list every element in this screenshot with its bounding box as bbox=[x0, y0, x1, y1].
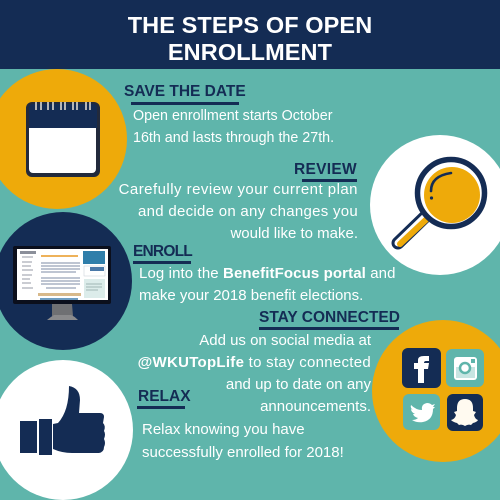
icon: calendar bbox=[0, 69, 127, 209]
text: save the date: 16th and lasts through the 27th. bbox=[133, 130, 334, 146]
text: stay connected: announcements. bbox=[260, 398, 371, 415]
text: review: Carefully review your current plan bbox=[119, 181, 358, 198]
text: review: would like to make. bbox=[230, 225, 358, 242]
icon: magnifying glass bbox=[370, 135, 500, 275]
heading: relax: RELAX bbox=[138, 388, 191, 405]
heading: enroll: ENROLL bbox=[133, 243, 192, 260]
text: save the date bbox=[133, 108, 334, 146]
title banner bbox=[0, 0, 500, 69]
title bbox=[128, 12, 372, 65]
text: stay connected bbox=[138, 332, 371, 415]
icon: computer monitor bbox=[0, 212, 132, 350]
text: relax: Relax knowing you have bbox=[142, 421, 305, 438]
text: stay connected: @WKUTopLife to stay connected bbox=[138, 354, 371, 371]
heading: stay connected: STAY CONNECTED bbox=[259, 309, 400, 326]
heading: review: REVIEW bbox=[294, 161, 357, 178]
title: THE STEPS OF OPEN bbox=[128, 12, 372, 38]
text: stay connected: Add us on social media at bbox=[199, 332, 371, 349]
text: relax: successfully enrolled for 2018! bbox=[142, 444, 344, 461]
text: enroll: make your 2018 benefit elections. bbox=[139, 287, 363, 304]
text: stay connected: and up to date on any bbox=[226, 376, 371, 393]
text: enroll bbox=[139, 265, 396, 304]
icon: thumbs up bbox=[0, 360, 133, 500]
text: enroll: Log into the BenefitFocus portal and bbox=[139, 265, 396, 282]
heading: save the date: SAVE THE DATE bbox=[124, 83, 246, 100]
text: relax bbox=[142, 421, 344, 461]
text: review bbox=[119, 181, 358, 242]
text: save the date: Open enrollment starts October bbox=[133, 108, 332, 124]
title: ENROLLMENT bbox=[168, 39, 332, 65]
icon: social media badges bbox=[372, 320, 500, 462]
text: review: and decide on any changes you bbox=[138, 203, 358, 220]
